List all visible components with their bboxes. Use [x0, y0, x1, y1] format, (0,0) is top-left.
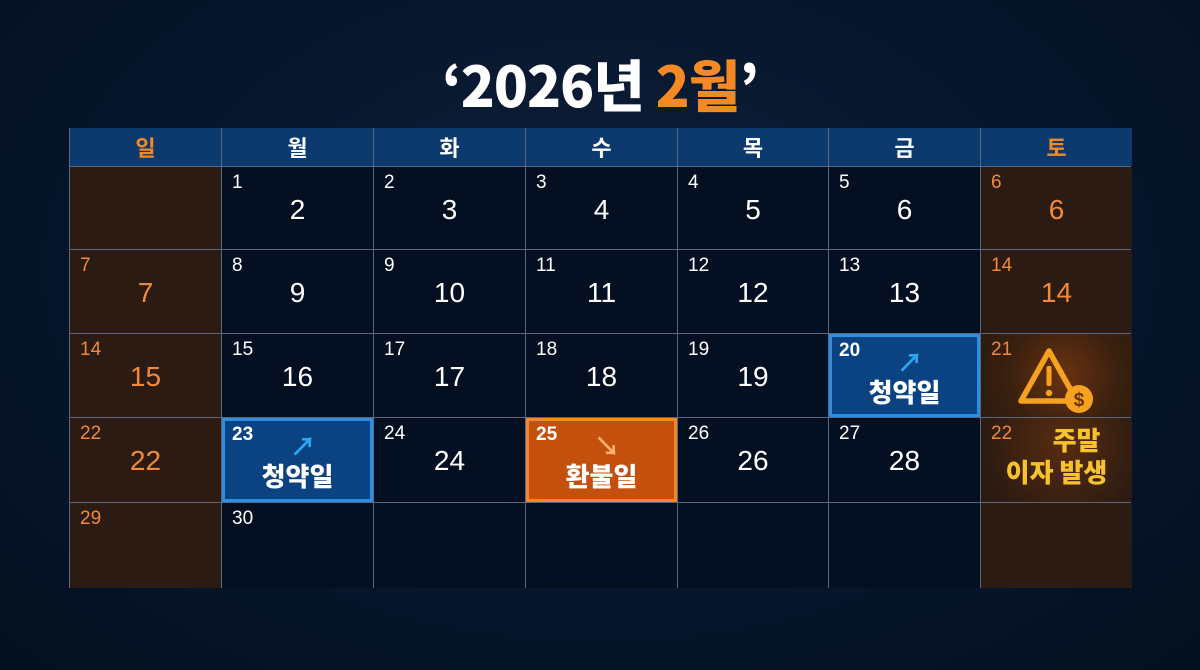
callout: 주말 이자 발생: 22 [991, 423, 1012, 444]
calendar grid: 17 [384, 339, 405, 360]
calendar grid: 14 [1041, 277, 1072, 308]
calendar grid: 24 [384, 423, 405, 444]
callout: 청약일 20: ↗ [897, 348, 923, 378]
calendar grid: 화 [439, 131, 460, 163]
calendar grid: 14 [991, 255, 1012, 276]
callout: 청약일 23: 23 [232, 424, 253, 445]
calendar grid: 17 [434, 361, 465, 392]
calendar grid: 3 [536, 172, 547, 193]
calendar grid: 19 [737, 361, 769, 392]
callout: 환불일 25: 환불일 [566, 457, 637, 494]
callout: 청약일 23: 청약일 [262, 457, 333, 494]
calendar grid: 15 [130, 361, 161, 392]
calendar grid: 7 [80, 255, 91, 276]
callout: 청약일 23 [222, 418, 373, 502]
calendar grid: 28 [889, 445, 920, 476]
header: days [70, 128, 221, 166]
calendar grid: 10 [434, 277, 465, 308]
calendar grid: 9 [290, 277, 305, 308]
calendar grid: 22 [130, 445, 161, 476]
calendar grid: 5 [839, 172, 850, 193]
callout: 청약일 20 [829, 334, 980, 417]
calendar grid: 4 [688, 172, 699, 193]
icon: warning with dollar [1018, 348, 1093, 413]
calendar grid: 4 [594, 194, 609, 225]
calendar grid: 5 [745, 194, 761, 225]
callout: 주말 이자 발생: 주말 [1053, 421, 1100, 458]
calendar grid: 30 [232, 508, 253, 529]
calendar grid: 금 [894, 131, 915, 163]
header: days: 일 [135, 131, 156, 163]
calendar grid: 7 [138, 277, 153, 308]
calendar grid: 13 [839, 255, 860, 276]
calendar grid: 월 [287, 131, 308, 163]
calendar grid: 2 [384, 172, 395, 193]
title: ‘2026년 2월’ [442, 43, 758, 124]
calendar grid: 2 [290, 194, 305, 225]
calendar grid: 18 [586, 361, 617, 392]
calendar grid: 26 [688, 423, 709, 444]
callout: 환불일 25: 25 [536, 424, 557, 445]
callout: 청약일 20: 20 [839, 340, 860, 361]
calendar grid: 27 [839, 423, 860, 444]
calendar grid: 목 [743, 131, 763, 163]
callout: 청약일 23: ↗ [290, 432, 316, 462]
calendar grid: 8 [232, 255, 243, 276]
callout: 주말 이자 발생 [981, 418, 1132, 502]
calendar grid: 수 [591, 131, 612, 163]
calendar grid: 22 [80, 423, 101, 444]
callout: 주말 이자 발생: 이자 발생 [1006, 453, 1107, 490]
calendar grid: 토 [1046, 131, 1067, 163]
callout: 환불일 25 [526, 418, 677, 502]
calendar grid: 15 [232, 339, 253, 360]
calendar grid: 9 [384, 255, 395, 276]
calendar grid: 1 [232, 172, 243, 193]
calendar grid: 18 [536, 339, 557, 360]
calendar grid: 6 [991, 172, 1002, 193]
calendar grid: 26 [737, 445, 769, 476]
calendar grid: 29 [80, 508, 101, 529]
calendar grid: 12 [737, 277, 769, 308]
calendar grid: 12 [688, 255, 709, 276]
calendar grid: 6 [1049, 194, 1064, 225]
icon: warning with dollar: $ [1074, 390, 1085, 411]
calendar grid: 6 [897, 194, 912, 225]
callout: 청약일 20: 청약일 [869, 373, 940, 410]
calendar grid: 11 [536, 255, 556, 276]
calendar grid: 3 [442, 194, 457, 225]
callout: 환불일 25: ↘ [594, 432, 620, 462]
callout: warning 21 [981, 334, 1132, 417]
calendar grid: 14 [80, 339, 101, 360]
callout: warning 21: 21 [991, 339, 1012, 360]
calendar grid: 19 [688, 339, 709, 360]
calendar grid: 11 [587, 277, 616, 308]
calendar grid [69, 128, 1131, 588]
calendar grid: 24 [434, 445, 465, 476]
calendar grid: 13 [889, 277, 920, 308]
calendar grid: 16 [282, 361, 313, 392]
